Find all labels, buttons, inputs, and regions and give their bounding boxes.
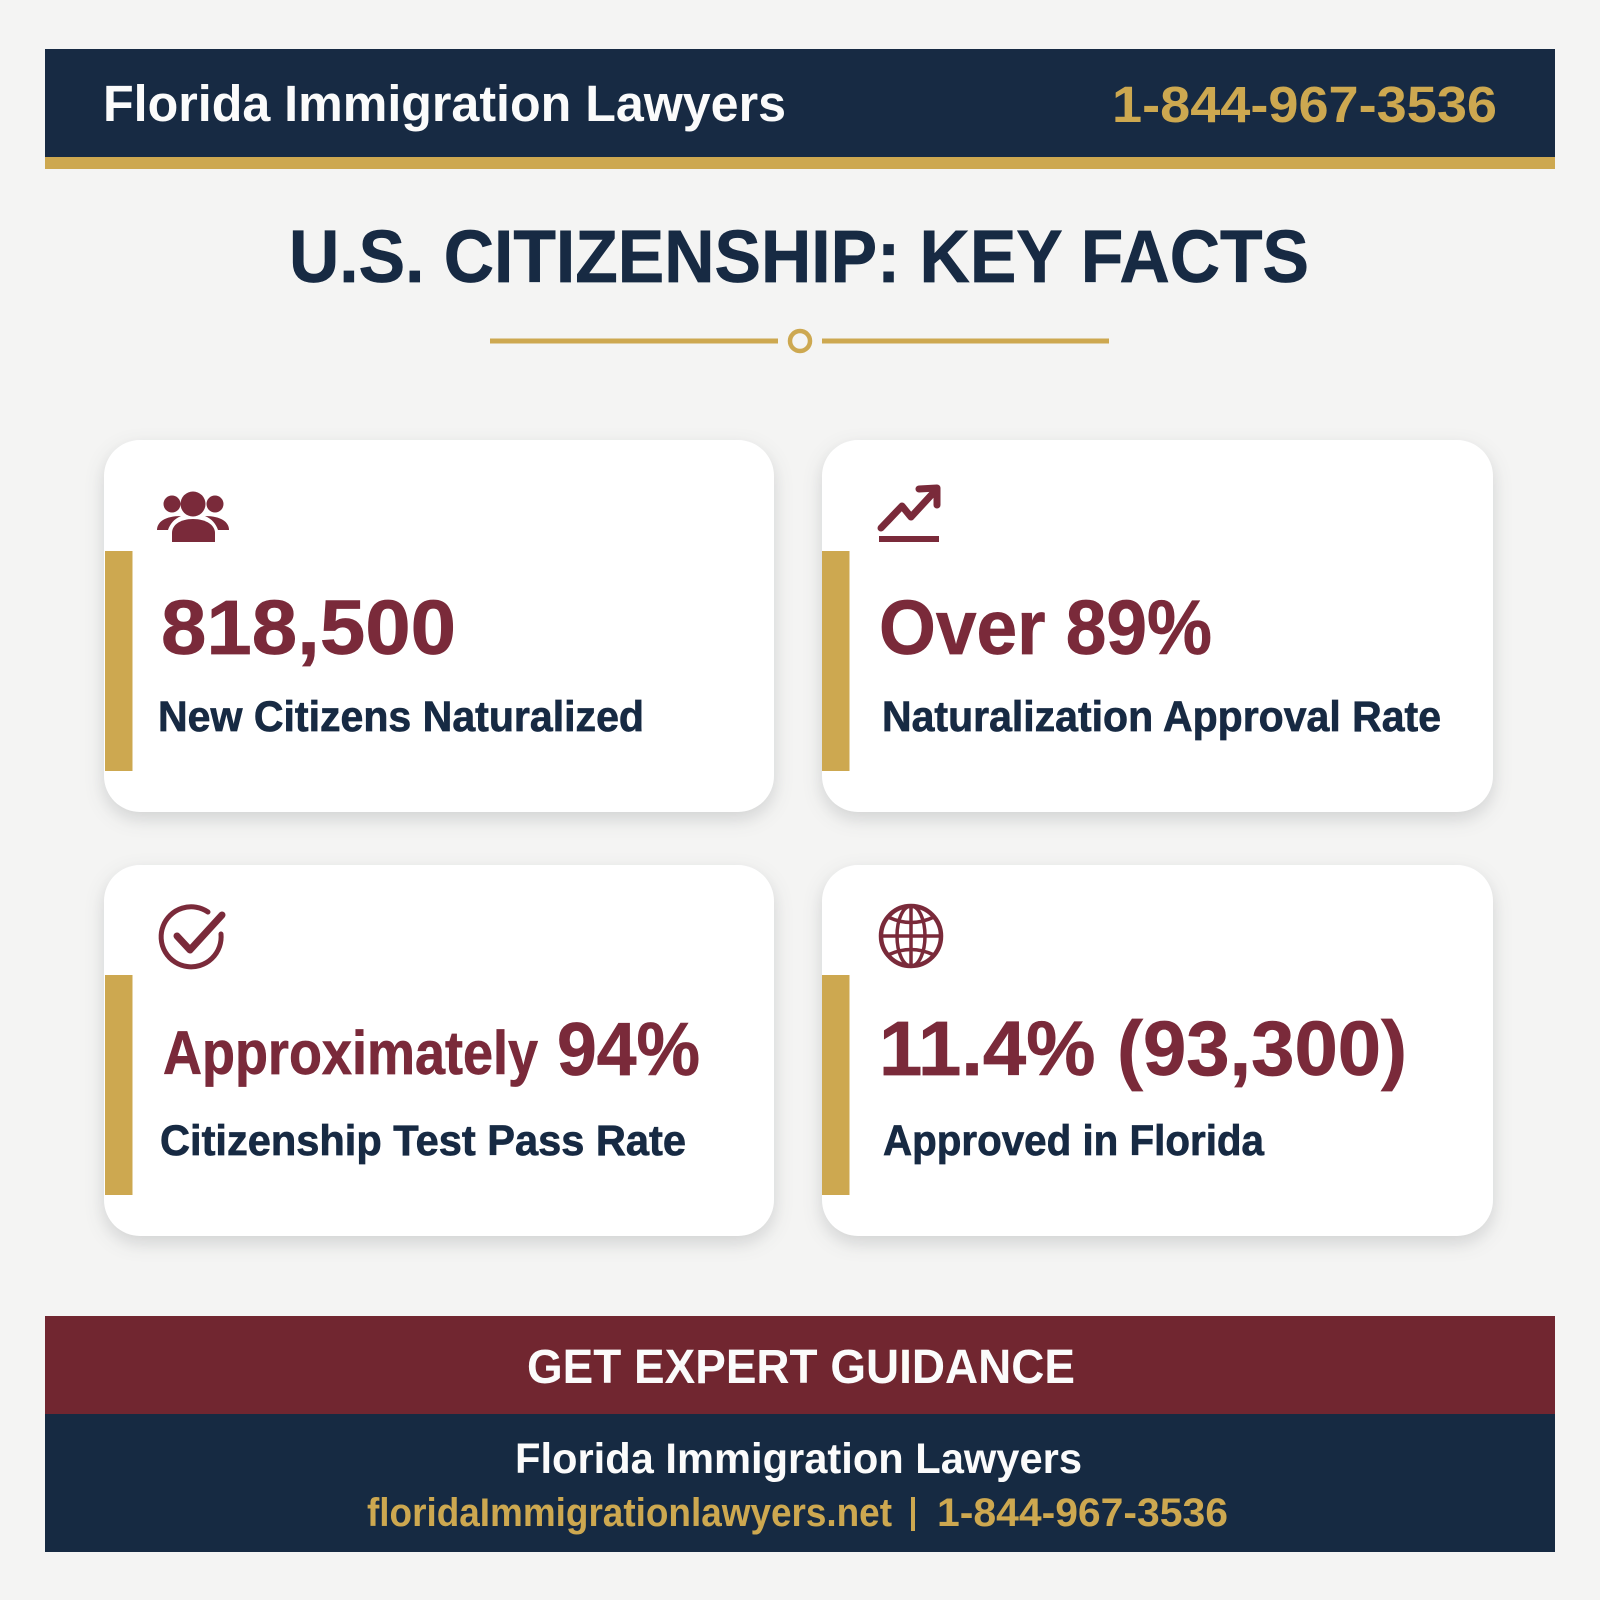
- call to action heading: GET EXPERT GUIDANCE: [527, 1341, 1075, 1394]
- panel: new citizens: [104, 440, 774, 812]
- panel: test pass rate: [104, 865, 774, 1236]
- stat value: Over 89%: [879, 585, 1212, 671]
- stat value: 818,500: [161, 585, 456, 671]
- panel: approved in florida: [822, 865, 1493, 1236]
- stat label: New Citizens Naturalized: [158, 693, 644, 741]
- icon: check circle: [161, 907, 222, 967]
- title: U.S. CITIZENSHIP: KEY FACTS: [289, 215, 1309, 298]
- icon: globe: [881, 906, 941, 966]
- stat label: Approved in Florida: [883, 1117, 1265, 1165]
- stat label: Citizenship Test Pass Rate: [160, 1117, 686, 1165]
- footer contact panel: [45, 1414, 1555, 1552]
- footer separator: [911, 1497, 915, 1531]
- panel: approval rate: [822, 440, 1493, 812]
- firm name: Florida Immigration Lawyers: [103, 75, 786, 132]
- stat label: Naturalization Approval Rate: [882, 693, 1441, 741]
- title divider: [490, 331, 1109, 351]
- stat value: 94%: [557, 1007, 700, 1091]
- stat value: Approximately: [163, 1019, 538, 1087]
- footer firm name: Florida Immigration Lawyers: [515, 1435, 1082, 1483]
- stat value: 11.4% (93,300): [879, 1006, 1407, 1092]
- footer phone: 1-844-967-3536: [937, 1491, 1228, 1535]
- call to action banner: [45, 1316, 1555, 1414]
- footer website: floridaImmigrationlawyers.net: [367, 1491, 892, 1535]
- icon: people: [157, 492, 229, 542]
- phone number: 1-844-967-3536: [1112, 76, 1497, 133]
- icon: trend chart: [879, 488, 939, 539]
- stat value: [163, 1007, 700, 1091]
- header banner: [45, 49, 1555, 169]
